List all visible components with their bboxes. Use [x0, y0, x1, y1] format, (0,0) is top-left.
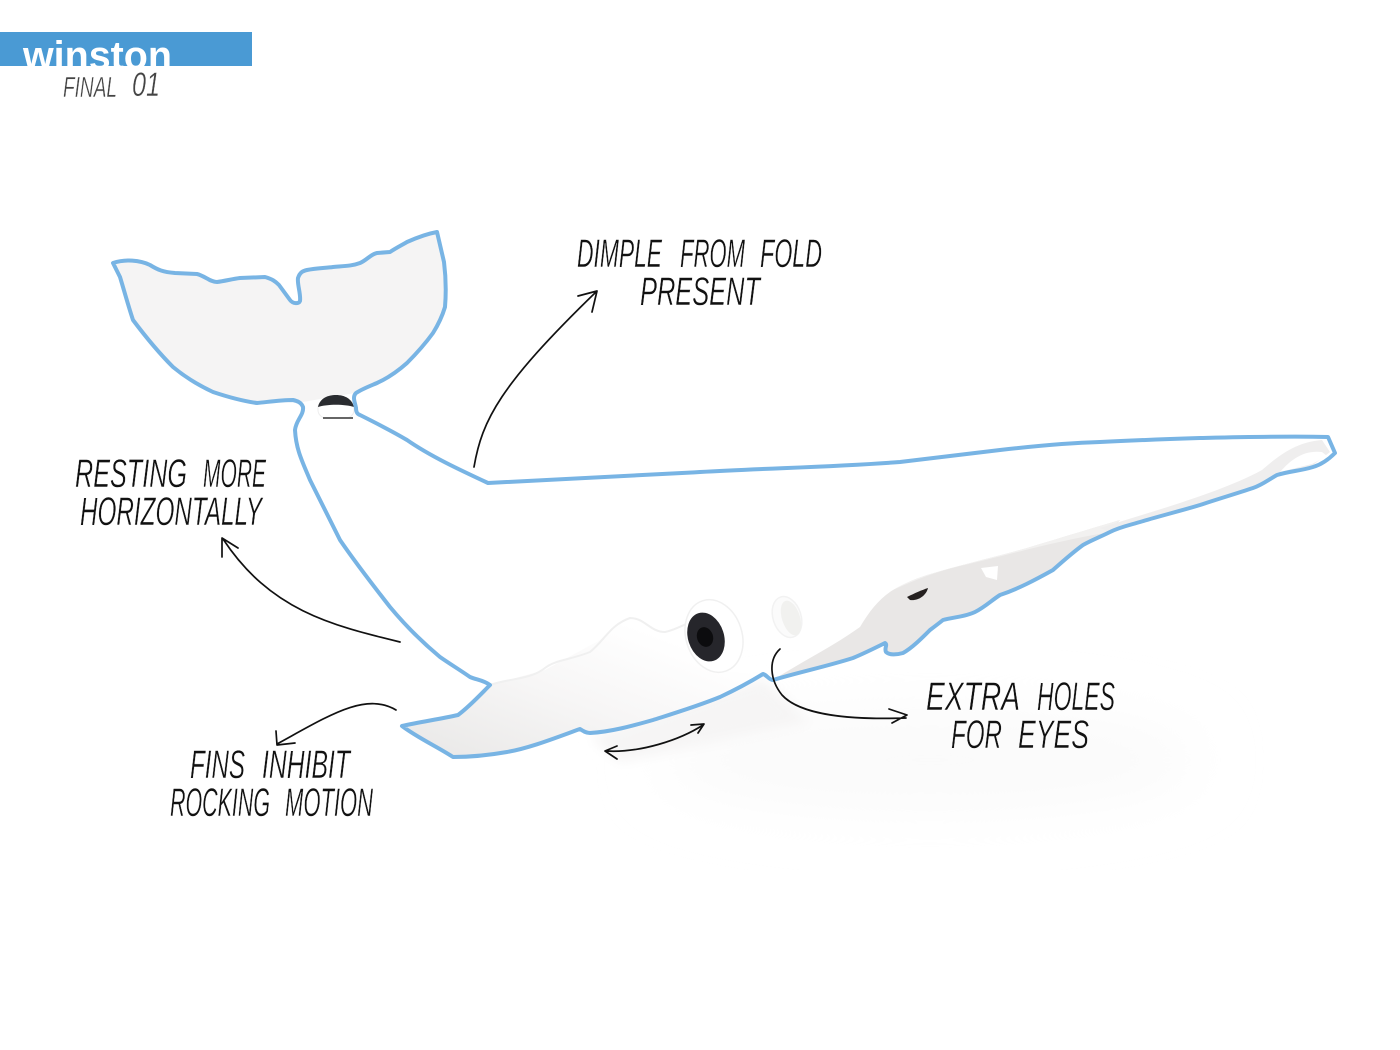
callout: resting more horizontally: HORIZONTALLY	[80, 490, 264, 534]
far bolt	[907, 588, 928, 600]
callout: extra holes for eyes: EXTRA	[926, 675, 1020, 719]
callout: dimple from fold: DIMPLE	[577, 232, 663, 276]
callout: dimple from fold: FROM	[680, 232, 745, 276]
soft ground shadow	[590, 678, 1200, 810]
callout: fins inhibit rocking motion	[170, 743, 373, 825]
far fin notch hole	[981, 566, 998, 580]
callout: extra holes for eyes: FOR	[951, 713, 1002, 757]
arrow: fins	[276, 704, 396, 745]
callout: extra holes for eyes	[926, 675, 1115, 757]
arrow: dimple	[474, 291, 597, 467]
callout: dimple from fold: PRESENT	[640, 270, 762, 314]
arrow: extra holes	[772, 649, 907, 723]
callout: dimple from fold	[577, 232, 822, 314]
infographic canvas	[0, 32, 1337, 816]
lower fin fill	[402, 620, 763, 757]
whale illustration	[113, 232, 1335, 757]
extra eye hole	[767, 593, 807, 641]
callout: extra holes for eyes: HOLES	[1037, 675, 1115, 719]
callout: fins inhibit rocking motion: ROCKING	[170, 781, 270, 825]
callout: resting more horizontally: MORE	[203, 452, 267, 496]
callout: resting more horizontally	[75, 452, 267, 534]
header: winston bar	[0, 32, 252, 66]
callout: dimple from fold: FOLD	[760, 232, 822, 276]
tail bolt	[318, 395, 354, 418]
eye bolt	[676, 592, 752, 680]
callout: fins inhibit rocking motion: FINS	[190, 743, 245, 787]
arrow: resting	[222, 538, 400, 642]
far fin upper light band	[893, 520, 1120, 590]
callout: fins inhibit rocking motion: INHIBIT	[262, 743, 352, 787]
callout: extra holes for eyes: EYES	[1018, 713, 1089, 757]
callout: resting more horizontally: RESTING	[75, 452, 187, 496]
tail fluke fill	[113, 232, 445, 403]
far fin fill	[773, 520, 1120, 680]
whale blue outline	[113, 232, 1335, 757]
subtitle: final 01: FINAL	[63, 72, 117, 104]
flipper tip underside	[1100, 440, 1330, 532]
subtitle: final 01: 01	[132, 66, 160, 104]
callout: fins inhibit rocking motion: MOTION	[285, 781, 373, 825]
fin scallop highlight	[490, 618, 692, 685]
arrow: rocking motion double-headed	[605, 724, 704, 759]
project name: winston	[22, 34, 172, 78]
